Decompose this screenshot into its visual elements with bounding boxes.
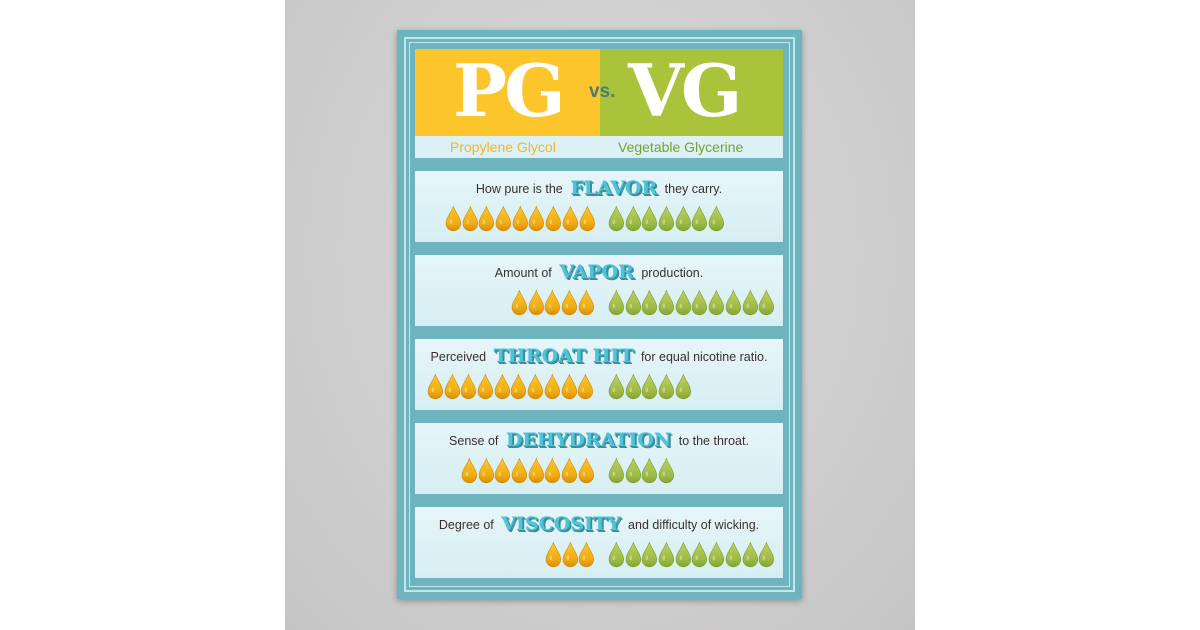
subtitle strip: Propylene Glycol	[450, 139, 556, 155]
panel: viscosity	[415, 507, 783, 578]
drops PG vapor	[512, 290, 594, 316]
drops VG throat	[608, 374, 691, 400]
drops VG dehydration	[608, 458, 674, 484]
panel: throat hit	[415, 339, 783, 410]
drops VG flavor	[608, 206, 724, 232]
panel: throat hit: Perceived THROAT HIT for equal nicotine ratio.	[431, 345, 767, 367]
VG block: VG	[628, 48, 739, 133]
panel: flavor: How pure is the FLAVOR they carry.	[476, 177, 722, 199]
poster frame	[397, 30, 802, 599]
subtitle strip: Vegetable Glycerine	[618, 139, 743, 155]
subtitle strip	[415, 136, 783, 158]
VG block	[600, 49, 783, 136]
panel: dehydration	[415, 423, 783, 494]
panel: dehydration: Sense of DEHYDRATION to the throat.	[449, 429, 749, 451]
PG block: PG	[453, 48, 563, 133]
vs label: vs.	[589, 81, 615, 102]
drops VG vapor	[608, 290, 774, 316]
PG block	[415, 49, 600, 136]
panel: vapor: Amount of VAPOR production.	[495, 261, 703, 283]
drops PG flavor	[446, 206, 595, 232]
panel: flavor	[415, 171, 783, 242]
panel: vapor	[415, 255, 783, 326]
drops PG viscosity	[546, 542, 594, 568]
panel: viscosity: Degree of VISCOSITY and difficulty of wicking.	[439, 513, 759, 535]
header	[415, 48, 783, 158]
drops VG viscosity	[608, 542, 774, 568]
drops PG throat	[428, 374, 593, 400]
drops PG dehydration	[462, 458, 594, 484]
